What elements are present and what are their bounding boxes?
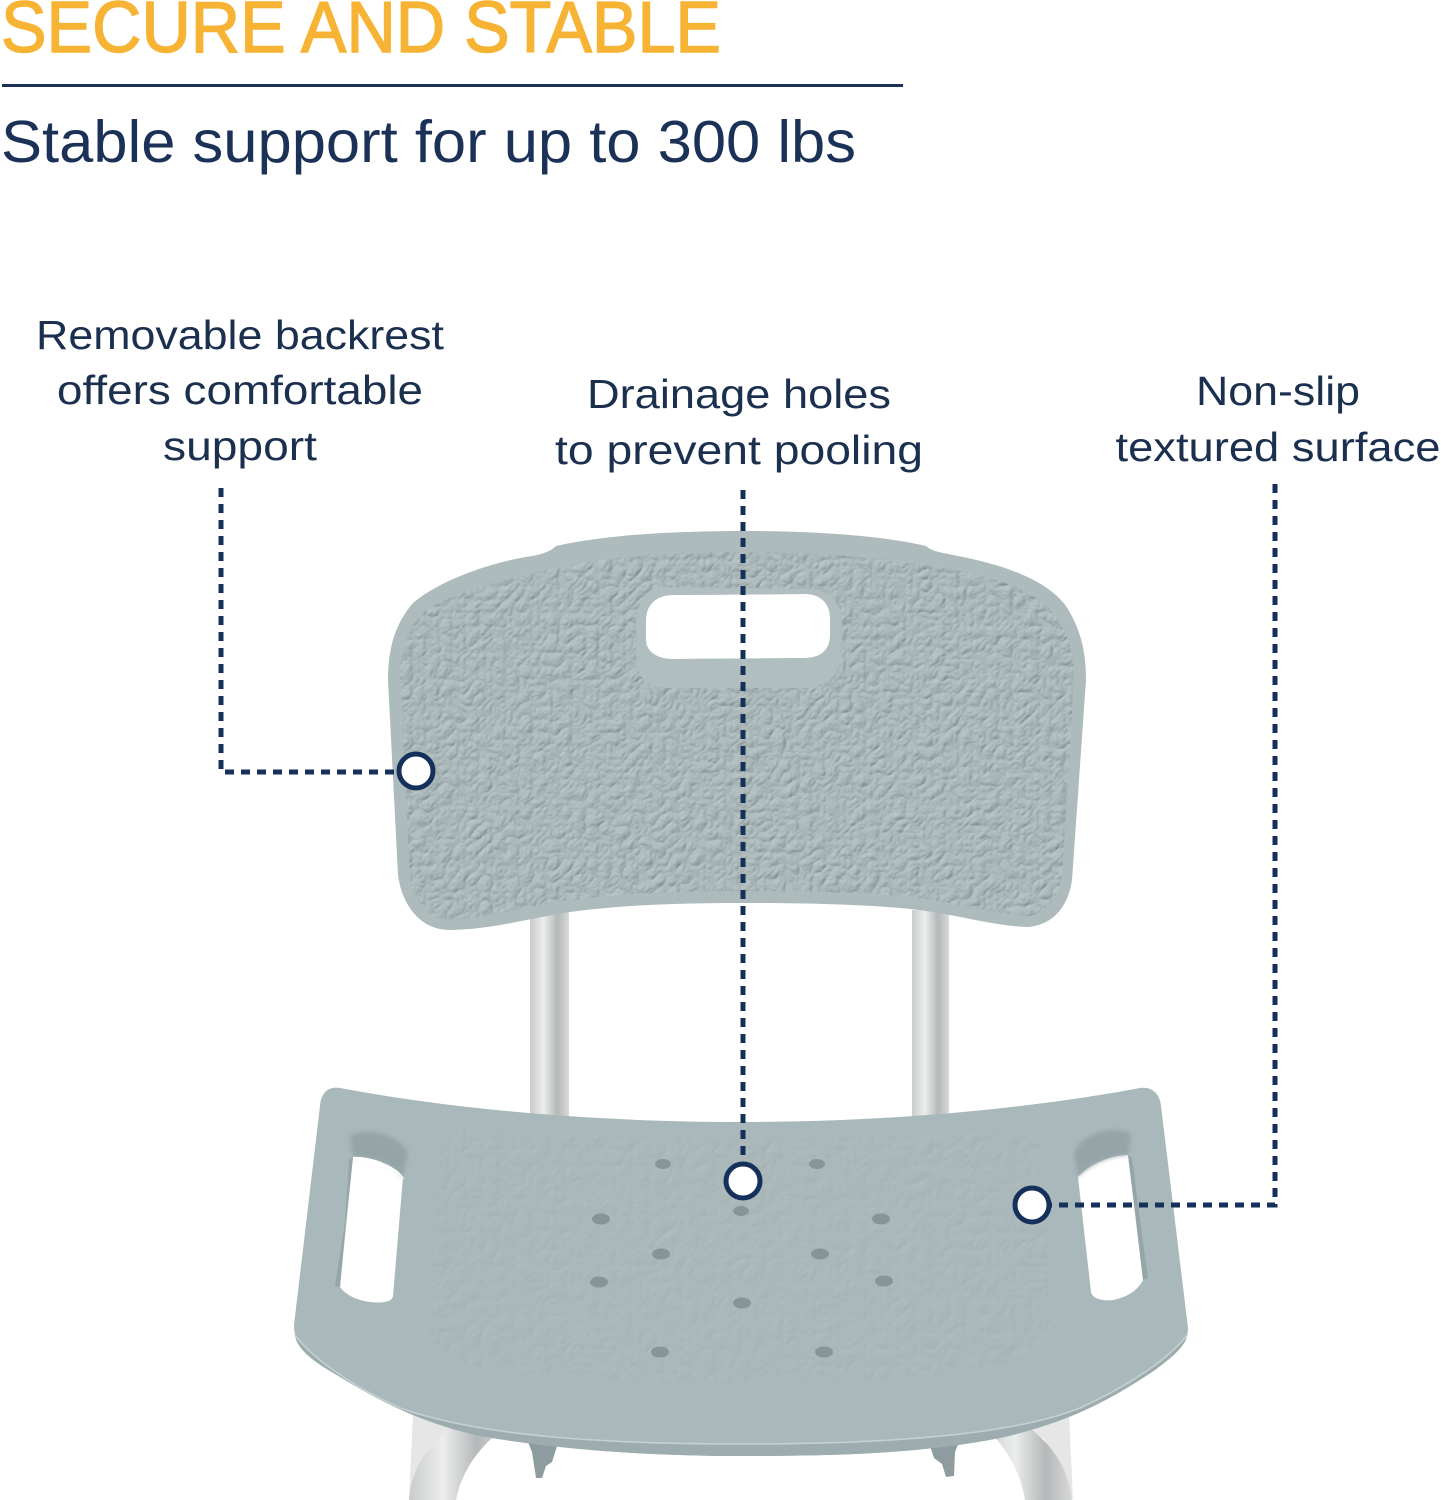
- grip recess: [637, 587, 840, 688]
- back post left: [530, 910, 569, 1125]
- marker: backrest: [399, 754, 433, 788]
- drainage holes: [590, 1159, 893, 1358]
- leader line: backrest: [221, 488, 398, 772]
- left handle recess: [335, 1132, 408, 1287]
- callout: non-slip surface: textured surface: [1116, 424, 1440, 470]
- front leg right: [984, 1392, 1073, 1500]
- callout: drainage holes: to prevent pooling: [555, 427, 923, 473]
- callout: non-slip surface: Non-slip: [1196, 368, 1360, 414]
- leader line: drainage holes: [740, 490, 746, 1165]
- leader line: non-slip surface: [1050, 484, 1275, 1205]
- title rule: [2, 84, 903, 87]
- callout: drainage holes: Drainage holes: [587, 371, 891, 417]
- seat: [294, 1088, 1188, 1456]
- suction foot right: [928, 1430, 964, 1477]
- callout: removable backrest: offers comfortable: [57, 367, 423, 413]
- marker: non-slip surface: [1015, 1188, 1049, 1222]
- textured seat panel: [428, 1130, 1051, 1382]
- callout: removable backrest: [36, 312, 445, 469]
- chair illustration: [294, 531, 1188, 1500]
- seat underside band: [295, 1335, 1187, 1456]
- subtitle: Stable support for up to 300 lbs: [1, 109, 856, 175]
- right handle recess: [1074, 1130, 1148, 1280]
- callout: drainage holes: [555, 371, 923, 473]
- seat rim highlight: [295, 1335, 1187, 1444]
- suction foot left: [523, 1430, 559, 1478]
- callout: non-slip surface: [1116, 368, 1440, 470]
- front leg left: [409, 1392, 506, 1500]
- callout: removable backrest: Removable backrest: [36, 312, 445, 358]
- callout: removable backrest: support: [163, 423, 318, 469]
- backrest: [388, 531, 1086, 930]
- backrest texture: [400, 552, 1074, 920]
- back post right: [912, 910, 949, 1125]
- marker: drainage holes: [726, 1164, 760, 1198]
